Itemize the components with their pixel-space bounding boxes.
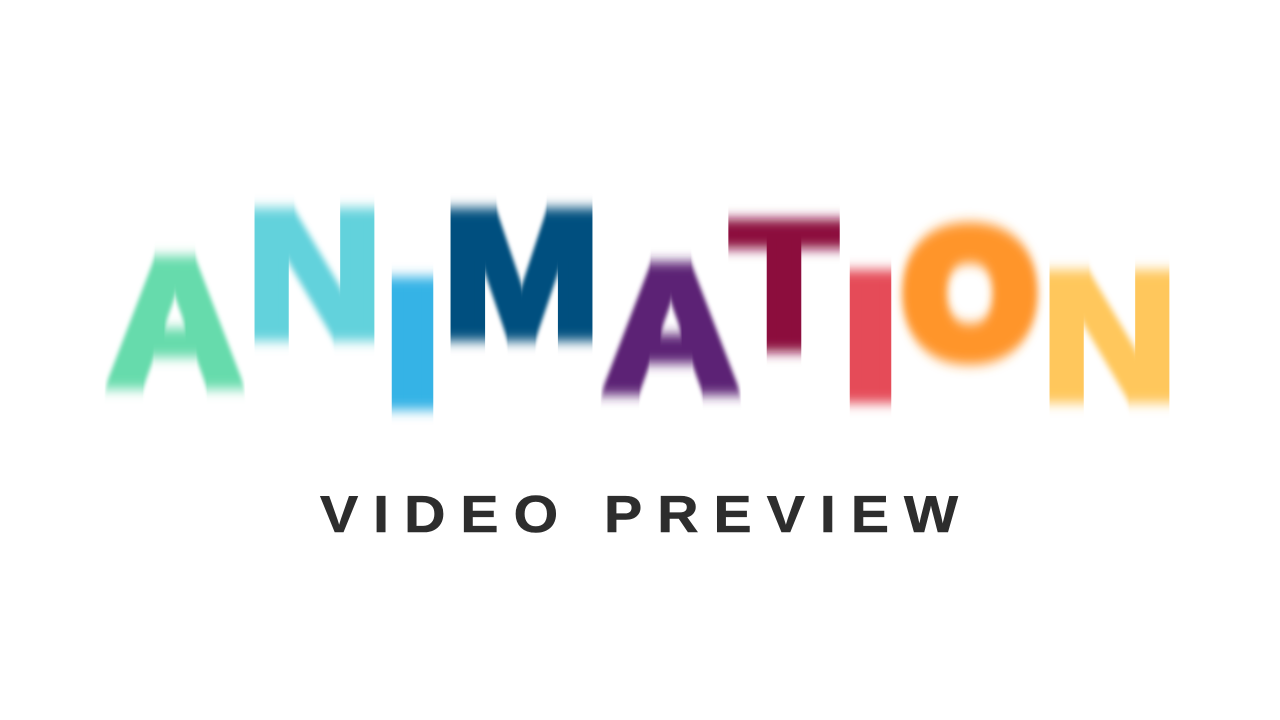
letter I red: I <box>842 237 899 437</box>
letter I blue: I <box>384 244 441 444</box>
letter N teal: N <box>247 174 382 374</box>
letter A green: A <box>107 222 243 422</box>
letter A purple: A <box>603 228 739 428</box>
letter O orange: O <box>906 199 1034 389</box>
letter M navy: M <box>443 174 600 374</box>
title: ANIMATION <box>107 174 1177 444</box>
subtitle: VIDEO PREVIEW: VIDEO PREVIEW <box>320 485 958 543</box>
letter T crimson: T <box>731 186 837 386</box>
letter N yellow: N <box>1042 236 1177 436</box>
